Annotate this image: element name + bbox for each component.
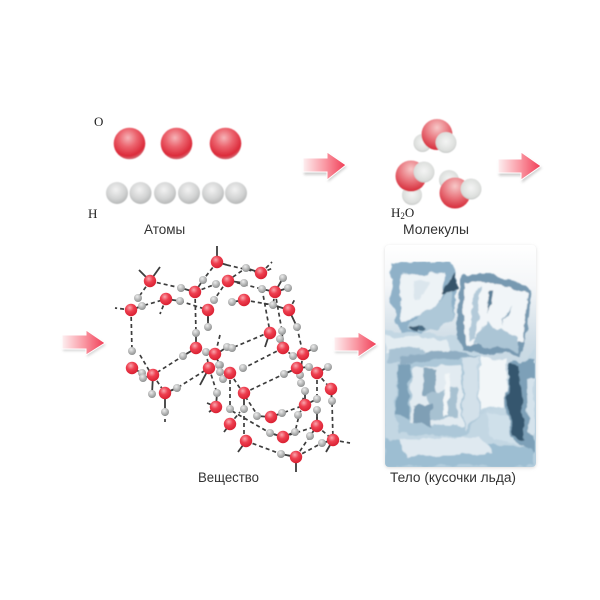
ice cube right edge bbox=[505, 360, 535, 452]
molecule right bbox=[439, 170, 482, 208]
molecule left bbox=[396, 160, 434, 205]
lower ice mass bbox=[385, 330, 535, 467]
ice cube bottom left bbox=[395, 350, 479, 437]
arrow: into substance lattice bbox=[62, 330, 106, 357]
hydrogen atoms row bbox=[106, 182, 247, 204]
molecule top bbox=[414, 119, 456, 153]
caption: molecules: Молекулы bbox=[403, 222, 469, 237]
caption: body (ice cubes): Тело (кусочки льда) bbox=[390, 470, 516, 485]
oxygen atoms bbox=[125, 256, 339, 463]
hydrogen atoms bbox=[128, 264, 336, 458]
label: water formula: O bbox=[405, 205, 414, 220]
covalent bonds bbox=[131, 246, 333, 472]
hydrogen bonds bbox=[115, 262, 350, 457]
oxygen atoms row bbox=[114, 128, 241, 159]
caption: substance: Вещество bbox=[198, 470, 259, 485]
label: oxygen symbol: O bbox=[94, 114, 103, 129]
arrow: molecules to substance bbox=[498, 152, 542, 183]
ice crystal lattice bbox=[115, 246, 350, 472]
label: water formula: H bbox=[391, 205, 400, 220]
caption: atoms: Атомы bbox=[144, 222, 185, 237]
arrow: substance to body bbox=[334, 332, 378, 359]
arrow: atoms to molecules bbox=[303, 152, 347, 182]
ice cube top right bbox=[456, 273, 532, 355]
label: water formula: 2 bbox=[400, 211, 405, 221]
label: hydrogen symbol: H bbox=[88, 206, 97, 221]
ice cube top left bbox=[389, 262, 458, 335]
photo: ice cubes bbox=[385, 245, 536, 468]
molecules of water bbox=[396, 119, 482, 208]
